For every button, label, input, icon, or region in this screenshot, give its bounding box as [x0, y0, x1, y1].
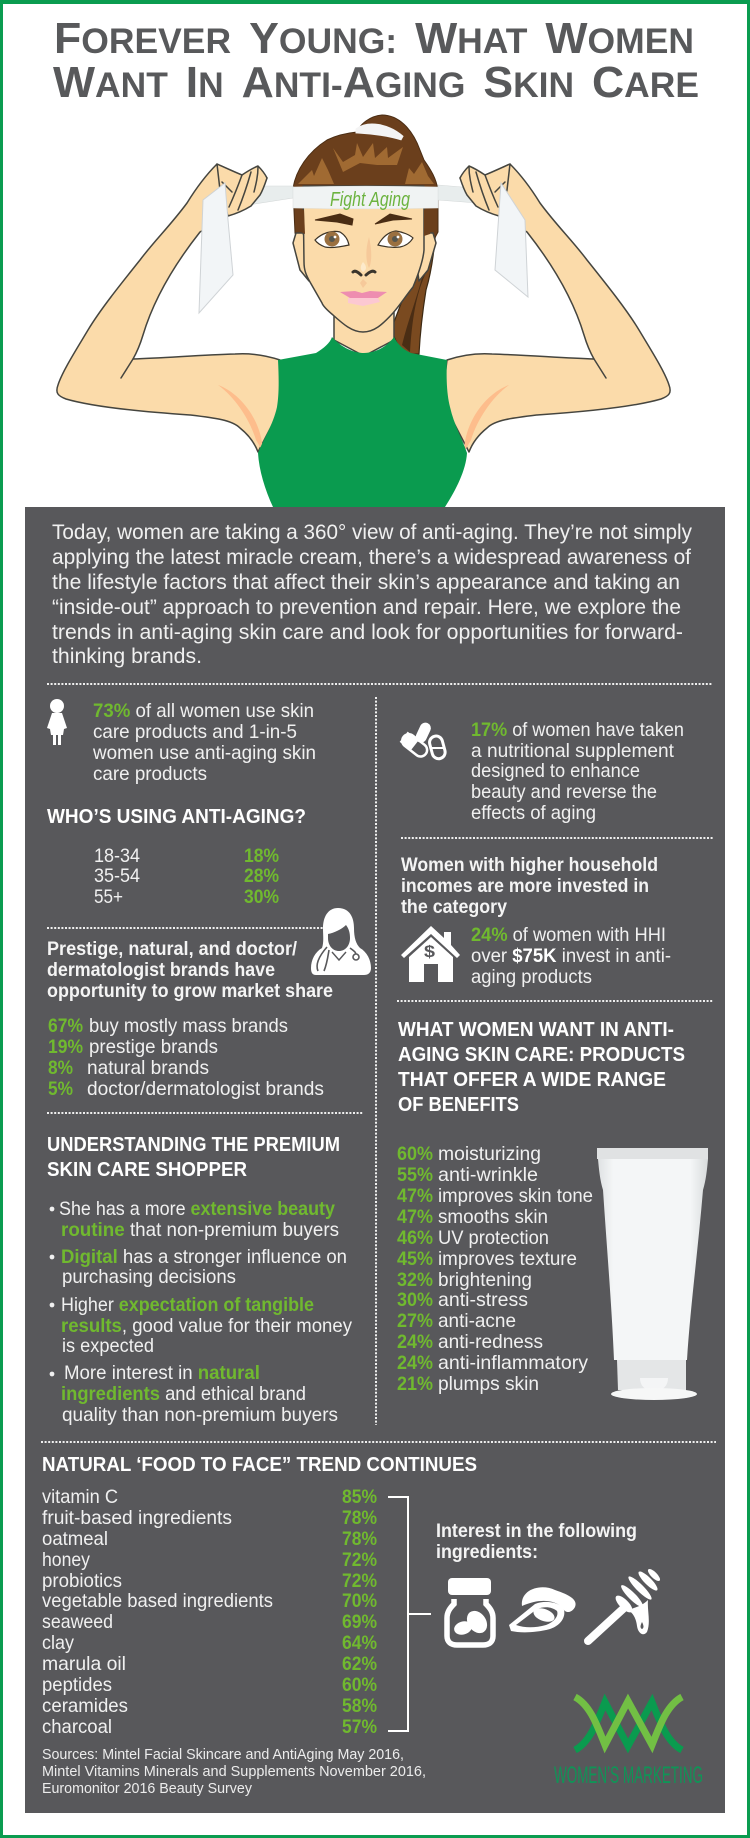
list: ingredients: probiotics [42, 1570, 122, 1592]
list: desired benefits: 45% [397, 1248, 433, 1270]
title [53, 14, 699, 107]
list: premium shopper bullets: She has a more extensive beauty [59, 1198, 335, 1220]
right arm [442, 164, 670, 452]
list: ingredients: 70% [342, 1590, 377, 1612]
stat: 17% supplements: beauty and reverse the [471, 781, 657, 803]
list: desired benefits: anti-stress [438, 1289, 528, 1311]
list: brand types: 19% [48, 1036, 83, 1058]
eyes [315, 231, 349, 247]
ears [293, 233, 312, 281]
list: brand types: buy mostly mass brands [89, 1015, 288, 1037]
heading: brand opportunity [47, 938, 333, 1002]
table: age groups: 55+ [94, 886, 123, 908]
icon: doctor [311, 908, 371, 975]
list: brand types: 5% [48, 1078, 73, 1100]
table: age groups: 18% [244, 845, 279, 867]
icon: house with dollar: $ [424, 942, 436, 961]
headband strips [248, 186, 293, 205]
heading: what women want: WHAT WOMEN WANT IN ANTI- [398, 1018, 674, 1041]
list: ingredients: honey [42, 1549, 90, 1571]
icon: cream tube [597, 1148, 708, 1400]
list: premium shopper bullets: Digital has a stronger influence on [61, 1246, 347, 1268]
heading: what women want: THAT OFFER A WIDE RANGE [398, 1068, 666, 1091]
list: desired benefits: plumps skin [438, 1373, 539, 1395]
list: ingredients: 72% [342, 1570, 377, 1592]
icon: avocado [509, 1587, 576, 1632]
list: ingredients: 72% [342, 1549, 377, 1571]
list: desired benefits: 46% [397, 1227, 433, 1249]
left arm [57, 164, 285, 452]
list: ingredients: charcoal [42, 1716, 112, 1738]
stat: 73% of women: care products [93, 763, 207, 785]
lips [340, 291, 387, 298]
list: ingredients: vegetable based ingredients [42, 1590, 273, 1612]
list: ingredients: 85% [342, 1486, 377, 1508]
left fist [217, 164, 267, 216]
stat: 17% supplements: designed to enhance [471, 760, 640, 782]
list: desired benefits: improves texture [438, 1248, 577, 1270]
title: FOREVER YOUNG: WHAT WOMEN [54, 14, 694, 63]
list: ingredients: 60% [342, 1674, 377, 1696]
list: brand types [48, 1015, 324, 1100]
heading: what women want: AGING SKIN CARE: PRODUCTS [398, 1043, 685, 1066]
list: premium shopper bullets: purchasing decisions [62, 1266, 236, 1288]
stat: 17% supplements: a nutritional supplement [471, 740, 675, 762]
list: ingredients: 78% [342, 1528, 377, 1550]
table: age groups: 28% [244, 865, 279, 887]
list: brand types: prestige brands [89, 1036, 218, 1058]
list: ingredients: 57% [342, 1716, 377, 1738]
list: desired benefits [397, 1143, 593, 1395]
stat: 17% supplements: 17% of women have taken [471, 719, 684, 741]
list: desired benefits: anti-redness [438, 1331, 543, 1353]
list: premium shopper bullets: is expected [62, 1335, 154, 1357]
list: premium shopper bullets: ingredients and ethical brand [61, 1383, 306, 1405]
list: brand types: 8% [48, 1057, 73, 1079]
list: brand types: natural brands [87, 1057, 209, 1079]
stat: 24% HHI: 24% of women with HHI [471, 924, 666, 946]
heading: brand opportunity: opportunity to grow market share [47, 980, 333, 1002]
sub-heading: interest in ingredients: Interest in the following [436, 1520, 637, 1542]
list: ingredients: 64% [342, 1632, 377, 1654]
hair highlights [333, 143, 403, 172]
list: desired benefits: anti-wrinkle [438, 1164, 538, 1186]
list: desired benefits: improves skin tone [438, 1185, 593, 1207]
title: WANT IN ANTI-AGING SKIN CARE [53, 58, 699, 107]
heading: brand opportunity: dermatologist brands have [47, 959, 275, 981]
list: ingredients: oatmeal [42, 1528, 108, 1550]
list: desired benefits: UV protection [438, 1227, 549, 1249]
right tail [495, 183, 528, 297]
heading: premium shopper: UNDERSTANDING THE PREMIUM [47, 1133, 340, 1156]
stat: 24% HHI: aging products [471, 966, 592, 988]
sources: Sources: Mintel Facial Skincare and AntiAging May 2016, [42, 1746, 404, 1763]
list: premium shopper bullets: quality than non-premium buyers [62, 1404, 338, 1426]
list: ingredients: seaweed [42, 1611, 113, 1633]
list: desired benefits: 47% [397, 1206, 433, 1228]
list: ingredients: marula oil [42, 1653, 126, 1675]
list: desired benefits: anti-acne [438, 1310, 516, 1332]
list: ingredients: 69% [342, 1611, 377, 1633]
list: desired benefits: 60% [397, 1143, 433, 1165]
hair [293, 115, 438, 262]
stat: 73% of women: care products and 1-in-5 [93, 721, 297, 743]
heading: household income: the category [401, 896, 507, 918]
list: ingredients: 62% [342, 1653, 377, 1675]
stat: 73% of women: women use anti-aging skin [92, 742, 316, 764]
intro text: trends in anti-aging skin care and look for opportunities for forward- [52, 620, 683, 644]
list: desired benefits: brightening [438, 1269, 532, 1291]
illustration: woman tying a Fight Aging headband [57, 115, 670, 507]
nose [353, 271, 375, 275]
list: ingredients: ceramides [42, 1695, 128, 1717]
sources: Mintel Vitamins Minerals and Supplements November 2016, [42, 1763, 426, 1780]
logo: Women's Marketing [554, 1697, 703, 1789]
heading: food to face: NATURAL ‘FOOD TO FACE” TREND CONTINUES [42, 1453, 477, 1476]
heading: premium shopper: SKIN CARE SHOPPER [47, 1158, 247, 1181]
stat: 73% of women [92, 700, 316, 785]
heading: who's using anti-aging: WHO’S USING ANTI-AGING? [47, 805, 306, 828]
list: desired benefits: 30% [397, 1289, 433, 1311]
headband text: Fight Aging [330, 189, 410, 211]
list: premium shopper bullets: results, good value for their money [61, 1315, 352, 1337]
list: ingredients: clay [42, 1632, 74, 1654]
ponytail [391, 205, 437, 354]
stat: 17% supplements [471, 719, 684, 824]
list: premium shopper bullets: routine that non-premium buyers [61, 1219, 339, 1241]
list: brand types: doctor/dermatologist brands [87, 1078, 324, 1100]
intro text: thinking brands. [52, 644, 202, 668]
heading: premium shopper [47, 1133, 340, 1181]
table: age groups [94, 845, 279, 908]
sources: Euromonitor 2016 Beauty Survey [42, 1780, 252, 1797]
bracket [388, 1497, 431, 1731]
list: brand types: 67% [48, 1015, 83, 1037]
stat: 73% of women: 73% of all women use skin [93, 700, 314, 722]
heading: what women want: OF BENEFITS [398, 1093, 519, 1116]
icon: pills [400, 721, 447, 760]
list: ingredients: 78% [342, 1507, 377, 1529]
icon: jar [447, 1578, 493, 1645]
list: desired benefits: smooths skin [438, 1206, 548, 1228]
intro text: “inside-out” approach to prevention and repair. Here, we explore the [52, 595, 681, 619]
intro text [52, 520, 692, 668]
table: age groups: 18-34 [94, 845, 140, 867]
list: ingredients: peptides [42, 1674, 112, 1696]
panel: main content [25, 507, 725, 1813]
stat: 24% HHI: over $75K invest in anti- [471, 945, 671, 967]
heading: what women want [398, 1018, 685, 1116]
sub-heading: interest in ingredients: ingredients: [436, 1541, 538, 1563]
list: ingredients: fruit-based ingredients [42, 1507, 232, 1529]
arm shadows [218, 385, 263, 452]
sources [42, 1746, 426, 1797]
intro text: the lifestyle factors that affect their skin’s appearance and taking an [52, 570, 680, 594]
list: ingredients: vitamin C [42, 1486, 118, 1508]
list: desired benefits: 24% [397, 1352, 433, 1374]
right fist [460, 164, 510, 216]
nose shading [366, 237, 371, 268]
green top [258, 337, 467, 507]
list: desired benefits: anti-inflammatory [438, 1352, 588, 1374]
sub-heading: interest in ingredients [436, 1520, 637, 1563]
table: age groups: 30% [244, 886, 279, 908]
heading: household income: incomes are more invested in [401, 875, 649, 897]
list: desired benefits: 32% [397, 1269, 433, 1291]
list: desired benefits: 24% [397, 1331, 433, 1353]
list: premium shopper bullets: Higher expectation of tangible [61, 1294, 314, 1316]
headband [293, 186, 438, 209]
heading: household income [401, 854, 658, 918]
icon: house with dollar [401, 926, 460, 982]
list: desired benefits: moisturizing [438, 1143, 541, 1165]
list: desired benefits: 55% [397, 1164, 433, 1186]
scrunchie [358, 126, 402, 138]
list: premium shopper bullets: More interest in natural [64, 1362, 260, 1384]
icon: woman figure [47, 699, 67, 745]
stat: 17% supplements: effects of aging [471, 802, 596, 824]
heading: household income: Women with higher household [401, 854, 658, 876]
heading: brand opportunity: Prestige, natural, and doctor/ [47, 938, 298, 960]
table: age groups: 35-54 [94, 865, 140, 887]
eyebrows [315, 214, 353, 225]
face [303, 186, 424, 332]
list: premium shopper bullets [50, 1198, 352, 1426]
list: desired benefits: 47% [397, 1185, 433, 1207]
list: ingredients: 58% [342, 1695, 377, 1717]
intro text: Today, women are taking a 360° view of anti-aging. They’re not simply [52, 520, 692, 544]
list: desired benefits: 27% [397, 1310, 433, 1332]
list: desired benefits: 21% [397, 1373, 433, 1395]
stat: 24% HHI [471, 924, 671, 988]
icon: honey dipper [588, 1567, 662, 1641]
left tail [199, 183, 233, 313]
list: ingredients [42, 1486, 377, 1738]
intro text: applying the latest miracle cream, there’s a widespread awareness of [52, 545, 691, 569]
neck [334, 312, 394, 356]
